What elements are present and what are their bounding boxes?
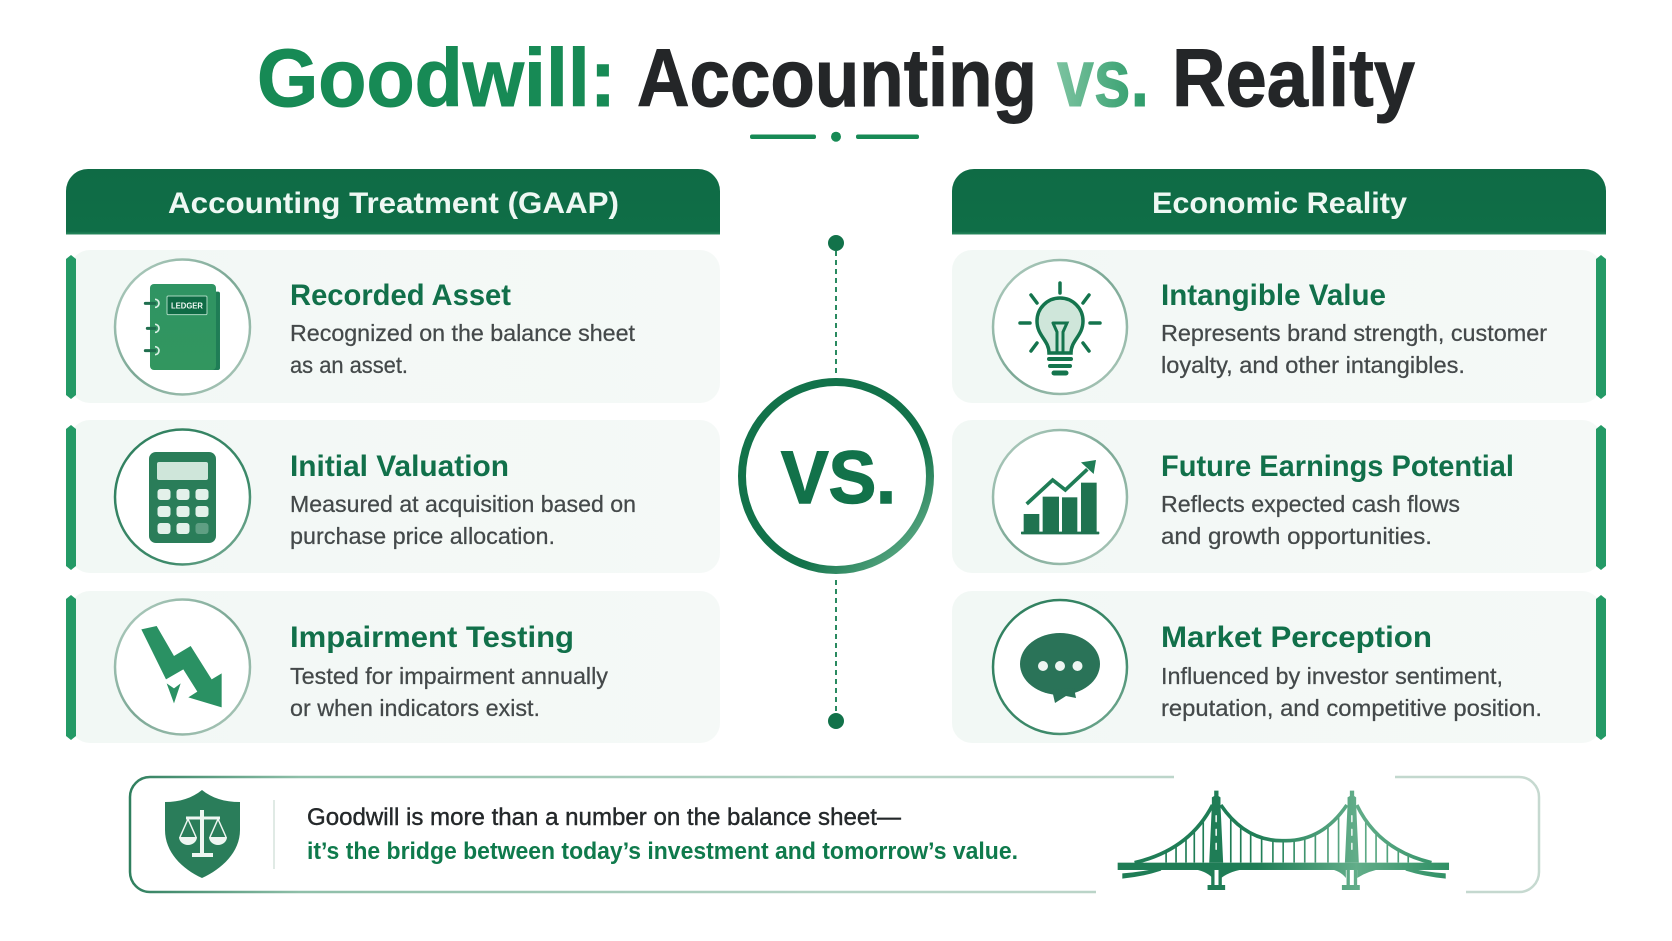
text: future earnings potential: Reflects expected cash flows [1161, 491, 1460, 517]
text: future earnings potential: and growth opportunities. [1161, 523, 1432, 549]
text: market perception: reputation, and competitive position. [1161, 695, 1542, 721]
text: market perception: Market Perception [1161, 621, 1432, 654]
title divider [750, 132, 919, 142]
center vs connector [742, 235, 930, 729]
text: initial valuation: purchase price allocation. [290, 523, 555, 549]
text: market perception [1161, 621, 1542, 721]
connector line top [828, 235, 844, 374]
card: initial valuation [66, 420, 720, 573]
text: future earnings potential [1161, 450, 1514, 549]
text: initial valuation: Initial Valuation [290, 450, 509, 483]
card: intangible value [952, 250, 1606, 403]
header: accounting treatment: Accounting Treatment (GAAP) [168, 187, 619, 220]
vs badge [742, 382, 930, 570]
card: recorded asset [66, 250, 720, 403]
text: initial valuation: Measured at acquisition based on [290, 491, 636, 517]
text: intangible value [1161, 279, 1547, 378]
title: Accounting [637, 33, 1037, 124]
text: initial valuation [290, 450, 636, 549]
banner text [307, 804, 1018, 865]
card: market perception [952, 591, 1606, 743]
icon: ledger [115, 260, 250, 394]
banner divider [273, 800, 275, 869]
header: economic reality: Economic Reality [1152, 187, 1407, 220]
text: recorded asset: Recorded Asset [290, 279, 511, 312]
icon: ledger: LEDGER [171, 301, 203, 311]
text: intangible value: loyalty, and other intangibles. [1161, 352, 1465, 378]
text: impairment testing: Tested for impairment annually [290, 663, 608, 689]
text: recorded asset: as an asset. [290, 352, 408, 378]
text: impairment testing [290, 621, 608, 721]
text: future earnings potential: Future Earnings Potential [1161, 450, 1514, 483]
text: intangible value: Represents brand strength, customer [1161, 320, 1547, 346]
panel: accounting treatment [66, 169, 720, 743]
text: impairment testing: or when indicators exist. [290, 695, 540, 721]
panel: economic reality [952, 169, 1606, 743]
card: impairment testing [66, 591, 720, 743]
icon: downward arrow [115, 600, 250, 734]
title [257, 33, 1415, 124]
banner frame [130, 777, 1539, 892]
text: recorded asset: Recognized on the balance sheet [290, 320, 636, 346]
header: economic reality [952, 169, 1606, 234]
text: market perception: Influenced by investor sentiment, [1161, 663, 1503, 689]
header: accounting treatment [66, 169, 720, 234]
text: recorded asset [290, 279, 636, 378]
title: Goodwill: [257, 33, 616, 124]
card: future earnings potential [952, 420, 1606, 573]
vs badge: VS. [781, 436, 896, 519]
icon: light bulb [993, 260, 1127, 394]
text: intangible value: Intangible Value [1161, 279, 1386, 312]
icon: calculator [115, 430, 250, 564]
icon: shield with scales [165, 790, 240, 878]
title: Reality [1172, 33, 1415, 124]
title: vs. [1057, 33, 1149, 124]
icon: growth chart [993, 430, 1127, 564]
callout: bottom banner [130, 777, 1539, 892]
text: impairment testing: Impairment Testing [290, 621, 574, 654]
icon: suspension bridge [1118, 783, 1449, 890]
banner text: it’s the bridge between today’s investment and tomorrow’s value. [307, 838, 1018, 865]
banner text: Goodwill is more than a number on the balance sheet— [307, 804, 901, 831]
connector line bottom [828, 580, 844, 729]
icon: chat bubble [993, 600, 1127, 734]
